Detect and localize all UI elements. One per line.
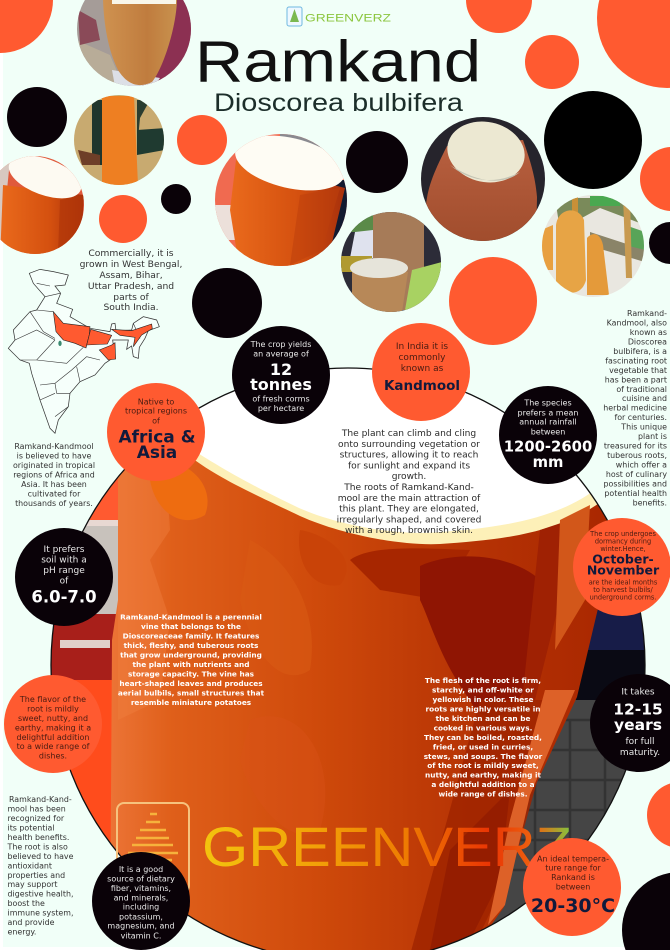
text: intro paragraph on the right: plant is [638, 432, 667, 441]
text: flesh of the root: a delightful addition to a [431, 780, 535, 789]
text: perennial vine description: that grow underground, providing [120, 650, 262, 660]
text: health benefits: immune system, [8, 909, 73, 918]
callout: harvest months: are the ideal months [589, 578, 658, 586]
callout: Kandmool name: Kandmool [384, 378, 460, 394]
text: plant climbing and roots: for sunlight and expand its [348, 461, 470, 471]
callout: rainfall: between [531, 427, 565, 436]
text: intro paragraph on the right: Ramkand- [627, 309, 667, 318]
callout: Kandmool name: In India it is [396, 342, 448, 352]
text: health benefits: mool has been [8, 804, 66, 814]
photo: market root with tall trunk [340, 210, 442, 312]
text: intro paragraph on the right: This unique [620, 423, 667, 432]
big faded Greenverz logo [117, 803, 572, 893]
text: intro paragraph on the right: bulbifera, is a [613, 347, 667, 356]
callout: harvest months: October- [592, 552, 654, 566]
text: origin paragraph: originated in tropical [13, 461, 95, 470]
text: flesh of the root: the kitchen and can be [436, 714, 530, 723]
callout: rainfall: prefers a mean [518, 408, 578, 417]
callout: yield 12 tonnes: per hectare [258, 404, 304, 413]
large cut root illustration [40, 368, 660, 950]
callout: flavor: to a wide range of [17, 742, 90, 751]
callout: nutrition: potassium, [119, 913, 163, 922]
text: plant climbing and roots: The roots of Ramkand-Kand- [343, 483, 474, 493]
callout: soil pH: soil with a [41, 556, 87, 566]
text: health benefits: health benefits. [8, 833, 69, 842]
text: plant climbing and roots: mool are the main attraction of [338, 494, 481, 504]
text: intro paragraph on the right: host of culinary [606, 470, 667, 479]
text: plant climbing and roots: structures, allowing it to reach [340, 451, 478, 461]
text: perennial vine description: Dioscoreaceae family. It features [123, 632, 260, 640]
text: flesh of the root: stews, and soups. The flavor [424, 752, 543, 761]
text: plant climbing and roots: growth. [392, 472, 426, 482]
text: health benefits: Ramkand-Kand- [9, 795, 72, 804]
photo: root with cream cut top [421, 115, 545, 245]
callout: nutrition: source of dietary [107, 875, 175, 884]
callout: rainfall: annual rainfall [519, 418, 577, 427]
callout: temperature: Rankand is [551, 873, 595, 882]
callout: nutrition: fiber, vitamins, [111, 884, 171, 893]
photo: tan root with maroon background [77, 0, 191, 86]
callout: native to Africa and Asia [107, 383, 205, 481]
text: intro paragraph on the right: of traditional [616, 385, 667, 394]
title: Ramkand [195, 30, 481, 94]
callout: years to maturity: years [614, 716, 662, 734]
callout: harvest months [573, 518, 670, 616]
callout: years to maturity: 12-15 [613, 700, 663, 718]
callout: temperature: 20-30°C [531, 895, 615, 917]
text: health benefits: and provide [8, 918, 55, 927]
text: flesh of the root: starchy, and off-white or [432, 686, 534, 694]
text: health benefits: may support [8, 880, 58, 889]
text: intro paragraph on the right: potential health [604, 489, 667, 498]
text: flesh of the root: cooked in various ways. [434, 723, 533, 732]
callout: native to Africa and Asia: of [152, 416, 160, 425]
photo: cut root, left [0, 156, 84, 254]
callout: soil pH: of [60, 576, 69, 586]
photo: peeled orange root on sand [74, 95, 165, 185]
callout: Kandmool name: commonly [398, 353, 446, 363]
text: origin paragraph: thousands of years. [15, 499, 93, 508]
root blotches [118, 455, 590, 950]
callout: flavor: delightful addition [16, 733, 90, 742]
callout: soil pH: 6.0-7.0 [31, 588, 97, 606]
callout: native to Africa and Asia: Asia [137, 443, 177, 463]
text: flesh of the root: They can be boiled, roasted, [424, 733, 542, 742]
callout: years to maturity: maturity. [620, 748, 660, 758]
logo: small Greenverz header: GREENVERZ [305, 12, 391, 24]
text: perennial vine description: heart-shaped leaves and produces [119, 679, 263, 688]
text: intro paragraph on the right: possibilities and [604, 479, 667, 488]
map of India with highlighted states [8, 269, 159, 433]
callout: rainfall: The species [523, 399, 572, 408]
text: health benefits: properties and [8, 871, 65, 880]
callout: native to Africa and Asia: tropical regions [125, 407, 187, 416]
callout: yield 12 tonnes: an average of [253, 349, 309, 358]
text: health benefits: The root is also [6, 842, 68, 851]
text: flesh of the root: of the root is mildly sweet, [427, 761, 539, 770]
callout: flavor: dishes. [39, 752, 67, 761]
text: perennial vine description: aerial bulbils, small structures that [118, 688, 265, 698]
text: where it is grown: Uttar Pradesh, and [88, 281, 174, 292]
text: flesh of the root: nutty, and earthy, making it [425, 771, 541, 780]
callout: Kandmool name [372, 323, 470, 421]
callout: nutrition: It is a good [119, 865, 163, 874]
callout: Kandmool name: known as [401, 364, 444, 374]
text: intro paragraph on the right: vegetable that [609, 366, 667, 375]
text: flesh of the root: The flesh of the root is firm, [425, 676, 541, 685]
text: health benefits: recognized for [8, 814, 65, 823]
callout: harvest months: winter.Hence, [600, 545, 646, 553]
text: intro paragraph on the right: Dioscorea [628, 337, 667, 346]
text: flesh of the root: roots are highly versatile in [426, 704, 540, 713]
text: plant climbing and roots: onto surrounding vegetation or [338, 440, 480, 450]
callout: nutrition: and minerals, [114, 894, 168, 903]
text: health benefits: energy. [8, 928, 36, 937]
text: origin paragraph: Asia. It has been [21, 480, 87, 489]
text: perennial vine description: Ramkand-Kandmool is a perennial [120, 612, 262, 622]
callout: yield 12 tonnes: The crop yields [250, 340, 311, 349]
callout: temperature: ture range for [545, 864, 602, 873]
big faded Greenverz logo: GREENVERZ [202, 815, 572, 878]
text: intro paragraph on the right: tuberous roots, [607, 451, 667, 460]
text: health benefits: antioxidant [8, 861, 52, 870]
text: intro paragraph on the right: Kandmool, also [607, 318, 667, 328]
text: where it is grown: grown in West Bengal, [80, 259, 182, 270]
text: where it is grown: South India. [103, 302, 159, 313]
callout: rainfall: mm [533, 454, 563, 471]
callout: yield 12 tonnes [232, 326, 330, 424]
text: where it is grown: Assam, Bihar, [99, 270, 163, 281]
callout: harvest months: dormancy during [595, 538, 651, 546]
text: intro paragraph on the right: for centuries. [614, 413, 667, 422]
callout: temperature: between [556, 882, 590, 891]
callout: soil pH: It prefers [44, 545, 85, 555]
text: intro paragraph on the right: known as [630, 328, 667, 337]
text: origin paragraph: Ramkand-Kandmool [14, 442, 94, 451]
callout: flavor: sweet, nutty, and [18, 714, 88, 723]
text: where it is grown: Commercially, it is [88, 248, 174, 259]
text: intro paragraph on the right: cuisine and [622, 394, 667, 403]
callout: harvest months: November [587, 562, 660, 578]
callout: flavor: The flavor of the [19, 695, 86, 704]
callout: temperature: An ideal tempera- [537, 854, 609, 863]
text: flesh of the root: yellowish in color. These [432, 695, 534, 704]
callout: flavor: root is mildly [27, 705, 79, 714]
callout: years to maturity: It takes [621, 688, 655, 698]
callout: rainfall: 1200-2600 [504, 438, 592, 456]
text: perennial vine description: vine that belongs to the [141, 622, 241, 631]
photo: cut root, centre [215, 134, 347, 266]
callout: harvest months: to harvest bulbils/ [593, 586, 653, 594]
text: health benefits: digestive health, [8, 890, 73, 899]
text: health benefits: believed to have [8, 852, 74, 861]
text: flesh of the root: wide range of dishes. [438, 790, 528, 799]
text: perennial vine description: resemble miniature potatoes [131, 698, 252, 707]
callout: native to Africa and Asia: Africa & [118, 428, 196, 448]
text: flesh of the root: fried, or used in curries, [433, 742, 533, 751]
text: intro paragraph on the right: which offer a [616, 460, 667, 470]
text: plant climbing and roots: The plant can climb and cling [341, 429, 476, 439]
callout: harvest months: underground corms. [590, 594, 656, 602]
text: origin paragraph: regions of Africa and [13, 470, 95, 479]
text: perennial vine description: storage capacity. The vine has [128, 670, 255, 678]
text: intro paragraph on the right: benefits. [633, 498, 667, 507]
callout: rainfall [499, 386, 597, 484]
text: health benefits: its potential [8, 823, 55, 832]
callout: harvest months: The crop undergoes [589, 530, 656, 538]
callout: nutrition [92, 852, 190, 950]
text: where it is grown: parts of [113, 292, 149, 303]
text: plant climbing and roots: this plant. They are elongated, [339, 505, 479, 515]
text: perennial vine description: thick, fleshy, and tuberous roots [124, 641, 259, 650]
subtitle: scientific name: Dioscorea bulbifera [214, 89, 463, 117]
text: intro paragraph on the right: has been a part [605, 375, 667, 384]
text: perennial vine description: the plant with nutrients and [132, 660, 250, 669]
callout: nutrition: vitamin C. [121, 931, 161, 940]
text: health benefits: boost the [8, 899, 45, 908]
callout: yield 12 tonnes: of fresh corms [252, 395, 310, 404]
text: origin paragraph: cultivated for [28, 489, 81, 498]
text: plant climbing and roots: irregularly shaped, and covered [337, 515, 481, 525]
callout: nutrition: including [123, 903, 159, 912]
callout: flavor [4, 675, 102, 773]
text: intro paragraph on the right: treasured for its [604, 442, 667, 451]
photo: hanging orange tubers [541, 195, 645, 299]
callout: years to maturity: for full [625, 737, 655, 747]
text: intro paragraph on the right: fascinating root [605, 356, 667, 365]
text: origin paragraph: is believed to have [17, 452, 92, 460]
callout: nutrition: magnesium, and [107, 922, 175, 931]
callout: yield 12 tonnes: tonnes [250, 375, 312, 394]
callout: soil pH: pH range [43, 566, 85, 576]
logo: small Greenverz header [287, 7, 391, 26]
text: plant climbing and roots: with a rough, brownish skin. [345, 526, 473, 536]
callout: native to Africa and Asia: Native to [138, 398, 174, 407]
text: intro paragraph on the right: herbal medicine [603, 404, 667, 413]
callout: soil pH [15, 528, 113, 626]
callout: yield 12 tonnes: 12 [270, 360, 292, 379]
callout: years to maturity [590, 674, 670, 772]
callout: temperature [523, 838, 621, 936]
callout: flavor: earthy, making it a [15, 723, 91, 732]
